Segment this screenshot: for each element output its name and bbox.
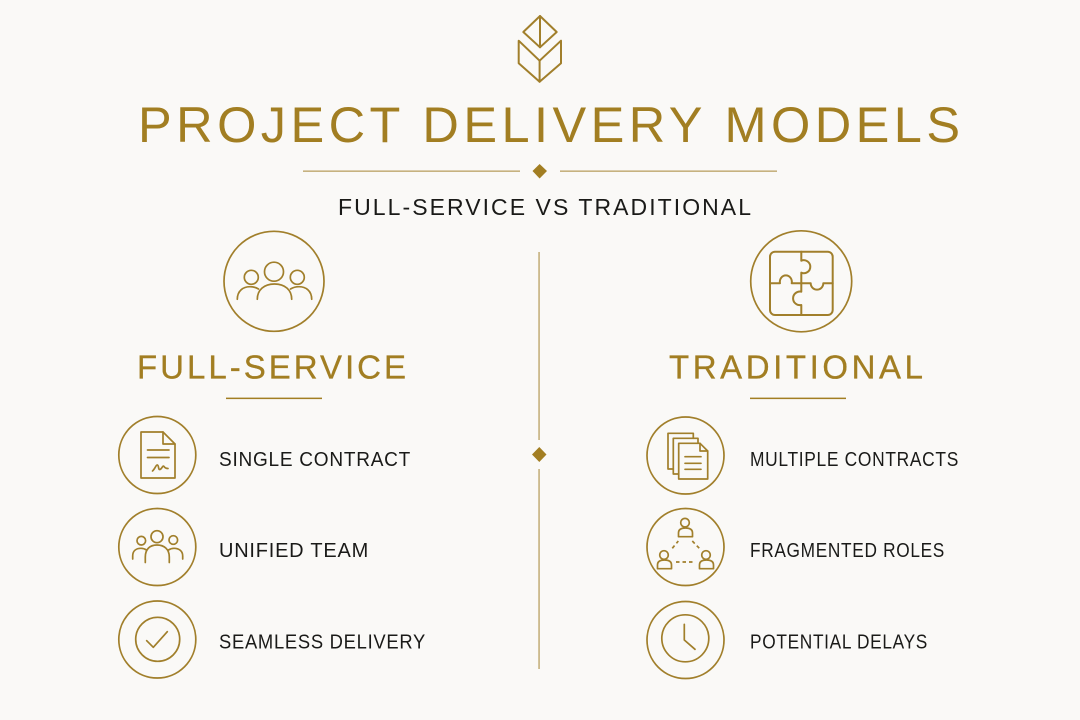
icon: multiple contracts — [647, 417, 724, 494]
title divider — [303, 164, 777, 178]
icon: seamless delivery — [119, 601, 196, 678]
icon: unified team — [119, 508, 196, 586]
panel: traditional — [647, 231, 959, 678]
icon: fragmented roles — [647, 508, 724, 586]
icon: single contract — [119, 416, 196, 494]
heading: full-service: FULL-SERVICE — [137, 348, 406, 386]
icon: logo — [519, 16, 561, 82]
label: multiple contracts: MULTIPLE CONTRACTS — [750, 448, 959, 471]
label: unified team: UNIFIED TEAM — [219, 539, 369, 562]
label: potential delays: POTENTIAL DELAYS — [750, 630, 928, 654]
icon: potential delays — [647, 602, 724, 678]
label: single contract: SINGLE CONTRACT — [219, 448, 411, 471]
heading underline — [226, 398, 322, 399]
icon: puzzle — [751, 231, 852, 332]
icon: full-service team — [224, 231, 324, 331]
panel: full-service — [119, 231, 426, 678]
heading underline — [750, 398, 846, 399]
center divider — [532, 252, 546, 669]
subtitle: FULL-SERVICE VS TRADITIONAL — [338, 194, 751, 220]
label: fragmented roles: FRAGMENTED ROLES — [750, 539, 945, 562]
label: seamless delivery: SEAMLESS DELIVERY — [219, 630, 426, 654]
heading: traditional: TRADITIONAL — [669, 348, 923, 386]
title: PROJECT DELIVERY MODELS — [138, 96, 960, 153]
